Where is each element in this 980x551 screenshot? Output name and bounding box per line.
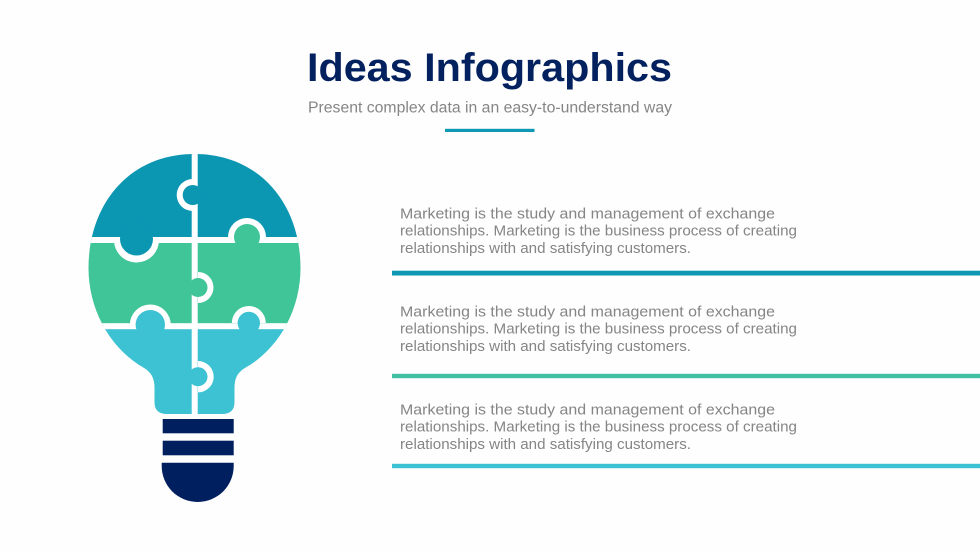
text block 2: relationships. Marketing is the business process of creating <box>400 321 797 338</box>
rule 1 <box>392 271 980 276</box>
text block 1 <box>400 205 797 257</box>
rule 3 <box>392 464 980 468</box>
title underline <box>445 129 534 132</box>
text block 3: relationships with and satisfying customers. <box>400 436 691 453</box>
text block 3: Marketing is the study and management of exchange <box>400 401 775 418</box>
rule 2 <box>392 374 980 378</box>
text block 2 <box>400 303 797 355</box>
text block 1: Marketing is the study and management of exchange <box>400 205 775 222</box>
bulb base <box>162 419 234 502</box>
title: Ideas Infographics <box>307 46 672 90</box>
text block 3: relationships. Marketing is the business process of creating <box>400 419 797 436</box>
puzzle pieces <box>88 154 300 414</box>
text block 3 <box>400 401 797 453</box>
text block 1: relationships with and satisfying customers. <box>400 240 691 257</box>
subtitle: Present complex data in an easy-to-understand way <box>308 100 672 116</box>
text block 2: Marketing is the study and management of exchange <box>400 303 775 320</box>
icon: puzzle light bulb <box>80 150 310 502</box>
infographic canvas <box>88 52 980 502</box>
text block 1: relationships. Marketing is the business process of creating <box>400 223 797 240</box>
text block 2: relationships with and satisfying customers. <box>400 338 691 355</box>
